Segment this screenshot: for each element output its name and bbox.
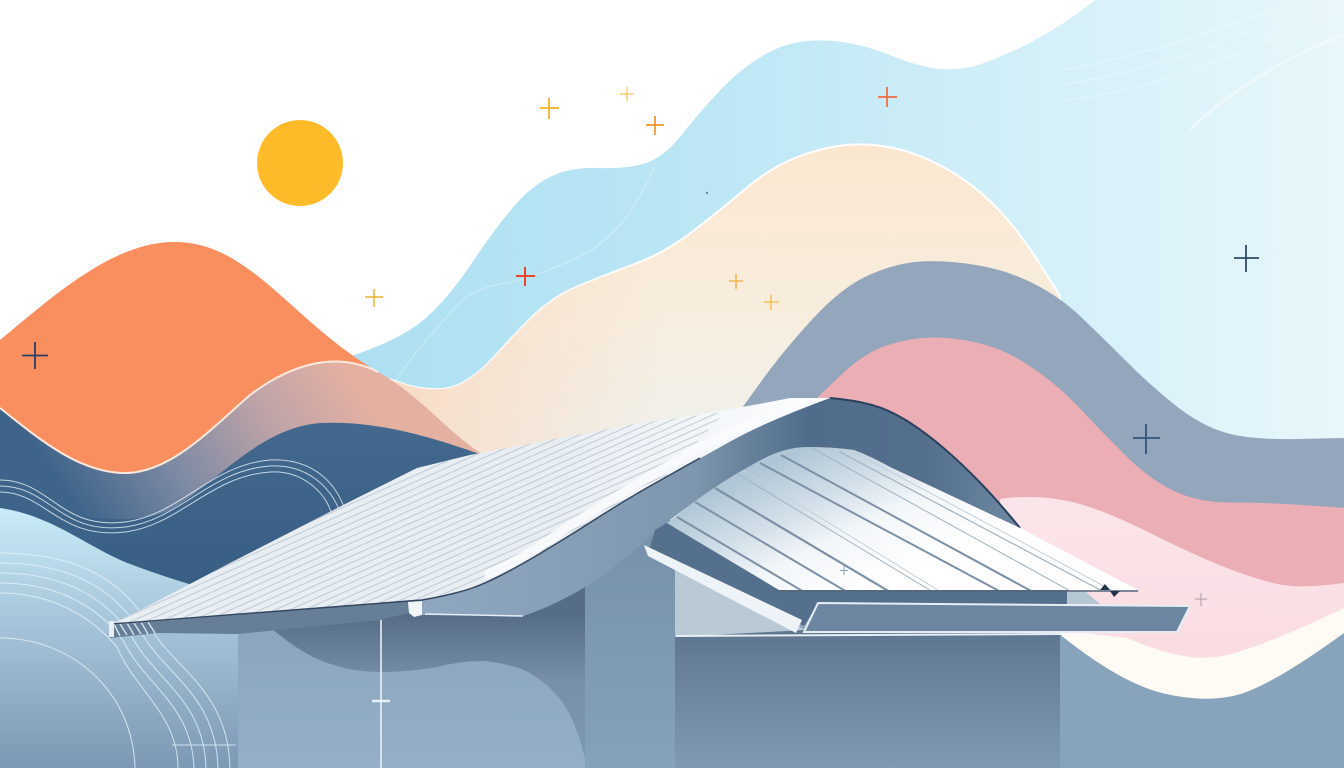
hill: navy xyxy=(0,400,485,620)
sparkle: amber 2 xyxy=(764,295,779,310)
sparkle: gold 1 xyxy=(540,98,559,119)
ledge line xyxy=(676,634,1060,636)
sparkle: red-orange xyxy=(878,87,897,107)
faint contour lines: top right and blue wave xyxy=(396,0,1344,380)
eave hatching: left end xyxy=(114,622,155,636)
hill: orange xyxy=(0,242,378,473)
sparkle: amber 1 xyxy=(729,274,743,289)
wave: lower right slate xyxy=(1060,633,1344,768)
gutter cap: centre xyxy=(408,601,422,617)
sparkle: navy right xyxy=(1234,245,1259,272)
wave: light pink xyxy=(1000,497,1344,768)
diagonal white fascia xyxy=(644,545,802,633)
sparkle: red xyxy=(516,267,535,286)
sun xyxy=(257,120,343,206)
roof: left eave underside xyxy=(110,602,412,638)
wave: cream xyxy=(382,144,1060,600)
house wall: centre column xyxy=(585,520,675,768)
sparkle: navy left xyxy=(22,342,48,369)
house wall: left section xyxy=(238,610,587,768)
sparkle: navy centre xyxy=(1133,424,1160,454)
under roof: dark cavity xyxy=(650,523,1068,626)
sparkle: orange xyxy=(646,116,664,135)
sparkle: gold 2 xyxy=(365,289,383,307)
house wall: right section xyxy=(675,630,1060,768)
contour lines: left xyxy=(0,460,345,768)
sparkle: tiny on panel xyxy=(840,566,848,575)
sparkle: pale gold xyxy=(620,87,634,101)
gutter: right box xyxy=(804,603,1190,632)
band: mauve fade xyxy=(0,362,485,519)
speck on blue wave xyxy=(706,192,708,194)
sparkle: tiny tan xyxy=(1195,593,1207,606)
wave: sky blue xyxy=(345,0,1344,768)
wave: slate grey xyxy=(742,261,1344,768)
vertical white post xyxy=(372,620,390,768)
wave: pale cream xyxy=(1060,608,1344,768)
wave: pink xyxy=(818,337,1344,768)
roof: left textured plane xyxy=(112,398,830,625)
roof: underside swoop and dark arch xyxy=(422,398,1020,616)
gutter cap: left xyxy=(109,621,114,637)
roof: right corrugated panel xyxy=(667,447,1138,597)
house wall: upper gable xyxy=(675,560,805,637)
house wall: eave shadow xyxy=(270,560,587,768)
soffit light patch xyxy=(1067,591,1100,604)
hill: pale blue xyxy=(0,508,240,768)
